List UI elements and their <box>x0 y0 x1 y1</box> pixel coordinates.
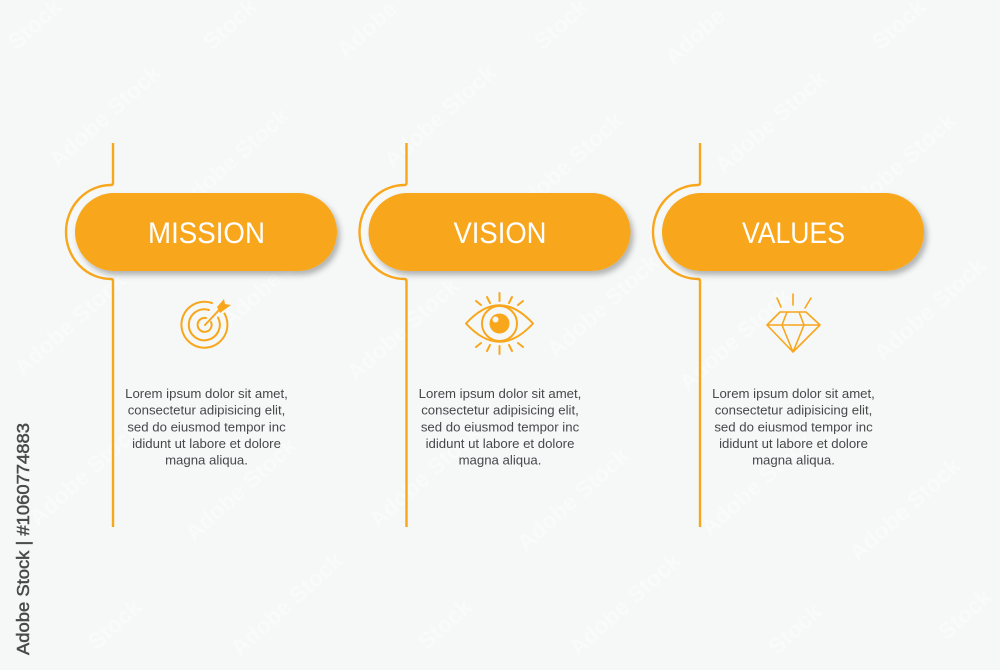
banner: mission <box>75 193 337 271</box>
text: Adobe Stock <box>564 547 686 661</box>
text: Adobe <box>659 2 730 70</box>
text block: mission: consectetur adipisicing elit, <box>128 402 285 418</box>
panel: vision <box>360 143 630 527</box>
heading: vision: VISION <box>454 217 546 250</box>
text block: values: sed do eiusmod tempor inc <box>714 419 873 434</box>
text block: mission: Lorem ipsum dolor sit amet, <box>125 386 288 401</box>
text block: values: Lorem ipsum dolor sit amet, <box>712 386 875 401</box>
panel: mission <box>66 143 337 527</box>
text block: vision: magna aliqua. <box>459 453 541 468</box>
text: Stock <box>413 593 477 655</box>
panel: values <box>653 143 924 527</box>
icon: eye <box>466 293 533 354</box>
text: Adobe Stock <box>542 249 664 363</box>
text: Adobe Stock <box>839 107 961 221</box>
text block: vision: sed do eiusmod tempor inc <box>421 419 580 434</box>
text block: mission: ididunt ut labore et dolore <box>132 436 281 451</box>
text: Stock <box>83 593 147 655</box>
text: Adobe Stock <box>226 547 348 661</box>
text block: values: ididunt ut labore et dolore <box>719 436 868 451</box>
timeline line: vision <box>360 143 406 527</box>
text block: vision: consectetur adipisicing elit, <box>421 402 579 418</box>
text: Adobe Stock <box>172 102 294 216</box>
text: Adobe Stock <box>364 419 486 533</box>
text: Adobe Stock <box>506 107 628 221</box>
text block: vision: Lorem ipsum dolor sit amet, <box>419 386 581 401</box>
heading: mission: MISSION <box>148 217 265 250</box>
text block: mission: magna aliqua. <box>165 453 248 468</box>
text: Adobe Stock <box>44 59 166 173</box>
timeline line: mission <box>66 143 113 527</box>
text: Adobe Stock <box>710 65 832 179</box>
text: Adobe Stock <box>342 272 464 386</box>
text: Adobe Stock <box>869 252 991 366</box>
timeline line: values <box>653 143 700 527</box>
text: Stock <box>763 598 827 660</box>
heading: values: VALUES <box>742 217 845 250</box>
text: Adobe Stock <box>24 417 146 531</box>
text block: values: magna aliqua. <box>752 453 835 468</box>
stock id caption: Adobe Stock | #1060774883 <box>13 423 33 655</box>
text: Adobe Stock <box>9 267 131 381</box>
text: Adobe Stock <box>216 219 338 333</box>
text: Stock <box>933 583 997 645</box>
text: Adobe Stock <box>844 452 966 566</box>
text: Adobe Stock <box>674 282 796 396</box>
text block: values: consectetur adipisicing elit, <box>715 402 872 418</box>
icon: diamond <box>767 294 820 352</box>
text block: vision: ididunt ut labore et dolore <box>426 436 574 451</box>
text: Adobe Stock <box>696 427 818 541</box>
text block: mission: sed do eiusmod tempor inc <box>127 419 286 434</box>
text: Adobe Stock <box>379 59 501 173</box>
text: Adobe Stock <box>180 432 302 546</box>
banner: vision <box>368 193 630 271</box>
banner: values <box>662 193 924 271</box>
icon: target with arrow <box>181 299 231 348</box>
text: Adobe Stock <box>512 442 634 556</box>
